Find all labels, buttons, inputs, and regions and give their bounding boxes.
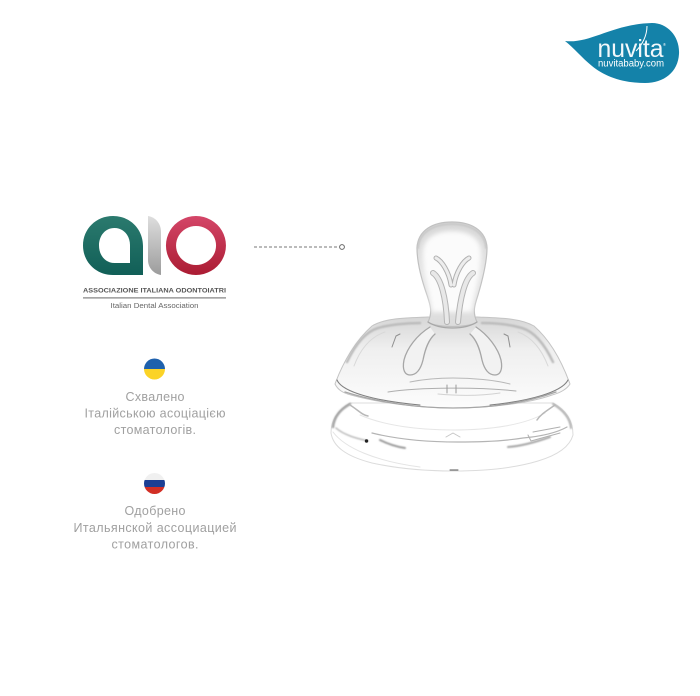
logo letter o: [166, 216, 226, 275]
dome: [335, 317, 570, 408]
text: Russian approval: Одобрено: [124, 504, 186, 518]
text: Ukrainian approval: [84, 390, 226, 437]
text: Ukrainian approval: Італійською асоціацією: [84, 406, 226, 420]
lower flange: [331, 403, 573, 471]
flag: Russia: [144, 473, 165, 495]
dotted connector: [254, 245, 344, 249]
logo: nuvita: ®: [663, 42, 666, 47]
flag: Ukraine: [144, 358, 165, 380]
logo: nuvita: nuvitababy.com: [598, 58, 664, 70]
dome petals: [403, 327, 435, 375]
text: Russian approval: Итальянской ассоциацией: [74, 521, 237, 535]
product: nipple: [331, 222, 573, 471]
text: Russian approval: [74, 504, 237, 552]
logo letter a: [83, 216, 143, 275]
association english name: Italian Dental Association: [110, 303, 199, 310]
logo: nuvita: nuvita: [598, 35, 664, 63]
text: Russian approval: стоматологов.: [112, 538, 198, 552]
teat: [417, 222, 487, 328]
association name: ASSOCIAZIONE ITALIANA ODONTOIATRI: [83, 288, 226, 294]
text: Ukrainian approval: Схвалено: [126, 390, 185, 404]
logo: nuvita: [565, 23, 679, 83]
logo: Italian Dental Association: [83, 216, 226, 310]
text: Ukrainian approval: стоматологів.: [114, 423, 196, 437]
teat petals: [436, 258, 469, 285]
logo letter i: [148, 216, 161, 275]
